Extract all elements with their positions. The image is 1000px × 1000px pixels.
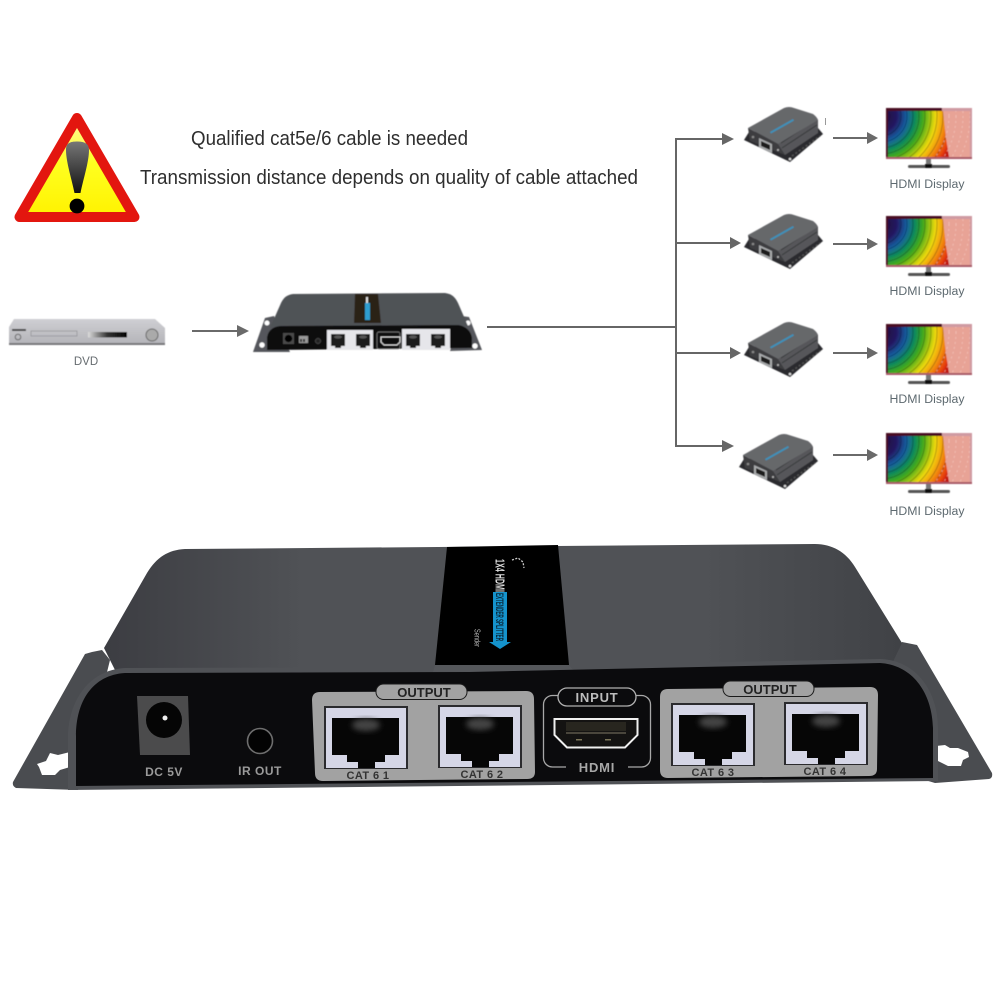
left mounting flange with slot — [13, 650, 110, 790]
display 4 — [792, 352, 972, 530]
output panel left — [327, 330, 373, 350]
sender text: Sender — [472, 629, 482, 647]
HDMI label: HDMI — [579, 760, 615, 775]
warning triangle icon — [20, 118, 134, 217]
left mounting flange — [253, 316, 290, 352]
receiver 4 — [739, 434, 818, 489]
DC 5V label: DC 5V — [145, 765, 183, 779]
label strip on top cover: EXTENDER SPLITTER — [493, 593, 505, 641]
label strip — [354, 294, 381, 323]
receiver 3 — [744, 322, 823, 377]
receiver 1 — [744, 107, 823, 162]
notice text: cable requirement: Qualified cat5e/6 cable is needed — [191, 127, 468, 150]
HDMI port — [554, 719, 638, 748]
port CAT 6 1 — [324, 706, 408, 769]
display 2 label: HDMI Display — [890, 286, 965, 298]
front rim — [68, 659, 938, 790]
port CAT 6 3 — [671, 703, 755, 766]
DC jack — [137, 696, 190, 755]
display 1 — [792, 27, 972, 205]
output panel left — [312, 684, 535, 782]
output tag — [723, 681, 814, 697]
front panel — [267, 325, 472, 350]
IR jack — [248, 728, 272, 754]
output tag: OUTPUT — [397, 685, 451, 700]
port CAT 6 2 — [438, 705, 522, 768]
top cover — [104, 544, 902, 680]
switch — [299, 336, 308, 343]
display 2 — [792, 135, 972, 313]
input tag: INPUT — [576, 690, 618, 705]
label strip on top cover — [433, 545, 574, 672]
display 3 — [792, 243, 972, 421]
IR OUT label: IR OUT — [238, 764, 282, 778]
HDMI port — [377, 332, 400, 349]
right mounting flange — [450, 316, 482, 351]
IR jack — [316, 338, 320, 344]
CAT 6 3 label: CAT 6 3 — [692, 767, 734, 779]
CAT 6 4 label: CAT 6 4 — [804, 766, 847, 778]
front panel — [76, 663, 933, 786]
logo mark — [512, 558, 524, 568]
receiver 2 — [744, 214, 823, 269]
line: splitter to bus — [487, 326, 677, 328]
display 3 label: HDMI Display — [890, 394, 965, 406]
display 4 label: HDMI Display — [890, 506, 965, 518]
receiver to display arrows — [833, 132, 878, 461]
DVD label: DVD — [74, 356, 98, 368]
distribution bus and branch arrows — [675, 133, 741, 452]
CAT 6 1 label: CAT 6 1 — [347, 770, 389, 782]
port CAT 6 4 — [784, 702, 868, 765]
output panel right — [402, 329, 450, 350]
output tag: OUTPUT — [743, 682, 797, 697]
output panel right — [660, 681, 878, 779]
blue arrow band — [489, 592, 511, 649]
notice text: transmission distance: Transmission distance depends on quality of cable attached — [140, 166, 638, 189]
large splitter device — [13, 544, 992, 790]
CAT 6 2 label: CAT 6 2 — [461, 769, 503, 781]
output tag — [376, 684, 467, 700]
DVD player icon — [9, 319, 165, 345]
right mounting flange with slot — [890, 642, 992, 783]
small splitter device — [253, 293, 482, 352]
arrow: DVD to splitter — [192, 325, 249, 337]
HDMI input group — [544, 688, 650, 775]
top cover — [270, 293, 468, 328]
product name on strip: 1X4 HDMI — [492, 559, 508, 592]
display 1 label: HDMI Display — [890, 179, 965, 191]
DC jack — [283, 333, 294, 344]
